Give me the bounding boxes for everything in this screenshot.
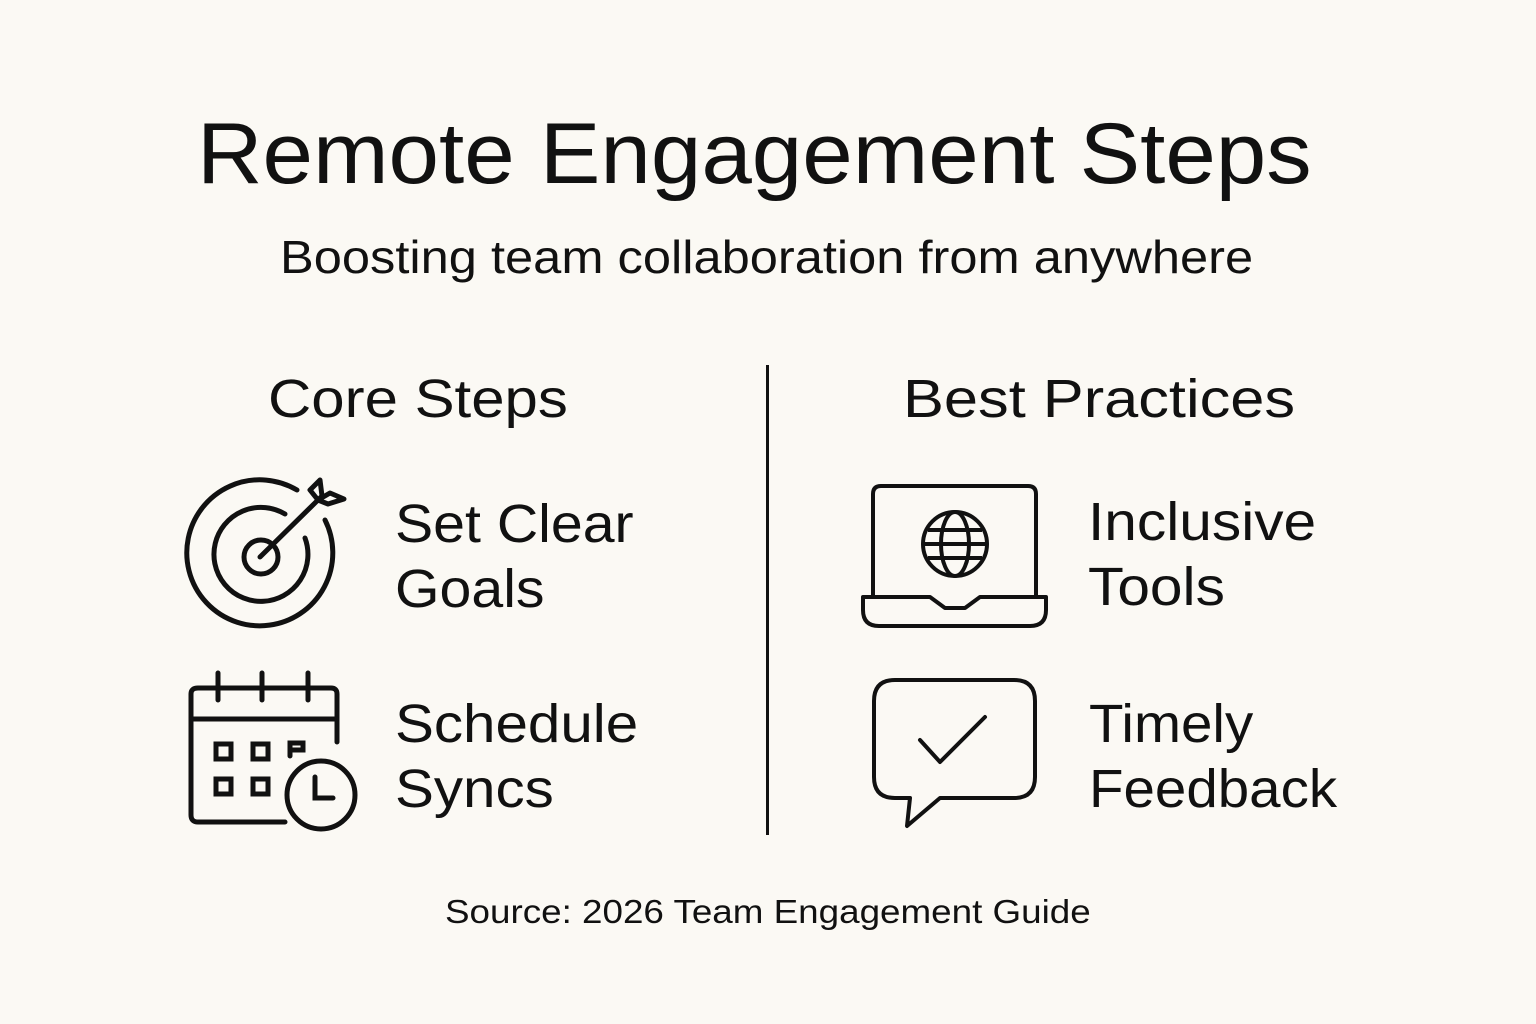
text: inclusive tools: Tools [1088,557,1225,617]
text: set clear goals: Goals [395,559,545,619]
source: Source: 2026 Team Engagement Guide [445,893,1091,930]
text: inclusive tools: Inclusive [1088,492,1316,552]
text: timely feedback: Feedback [1089,759,1337,819]
text: schedule syncs: Syncs [395,759,554,819]
icon: laptop with globe [861,484,1048,628]
text: set clear goals: Set Clear [395,494,634,554]
icon: calendar [188,670,358,832]
text: schedule syncs: Schedule [395,694,638,754]
text: timely feedback [1089,694,1338,819]
divider [766,365,769,835]
text: inclusive tools [1088,492,1316,617]
subtitle: Boosting team collaboration from anywhere [280,231,1253,283]
heading: core steps: Core Steps [268,369,568,429]
heading: best practices: Best Practices [903,369,1295,429]
icon: target [184,477,346,628]
text: schedule syncs [395,694,638,819]
text: set clear goals [395,494,634,619]
text: timely feedback: Timely [1089,694,1253,754]
icon: speech bubble with check [872,678,1037,828]
title: Remote Engagement Steps [197,106,1312,202]
